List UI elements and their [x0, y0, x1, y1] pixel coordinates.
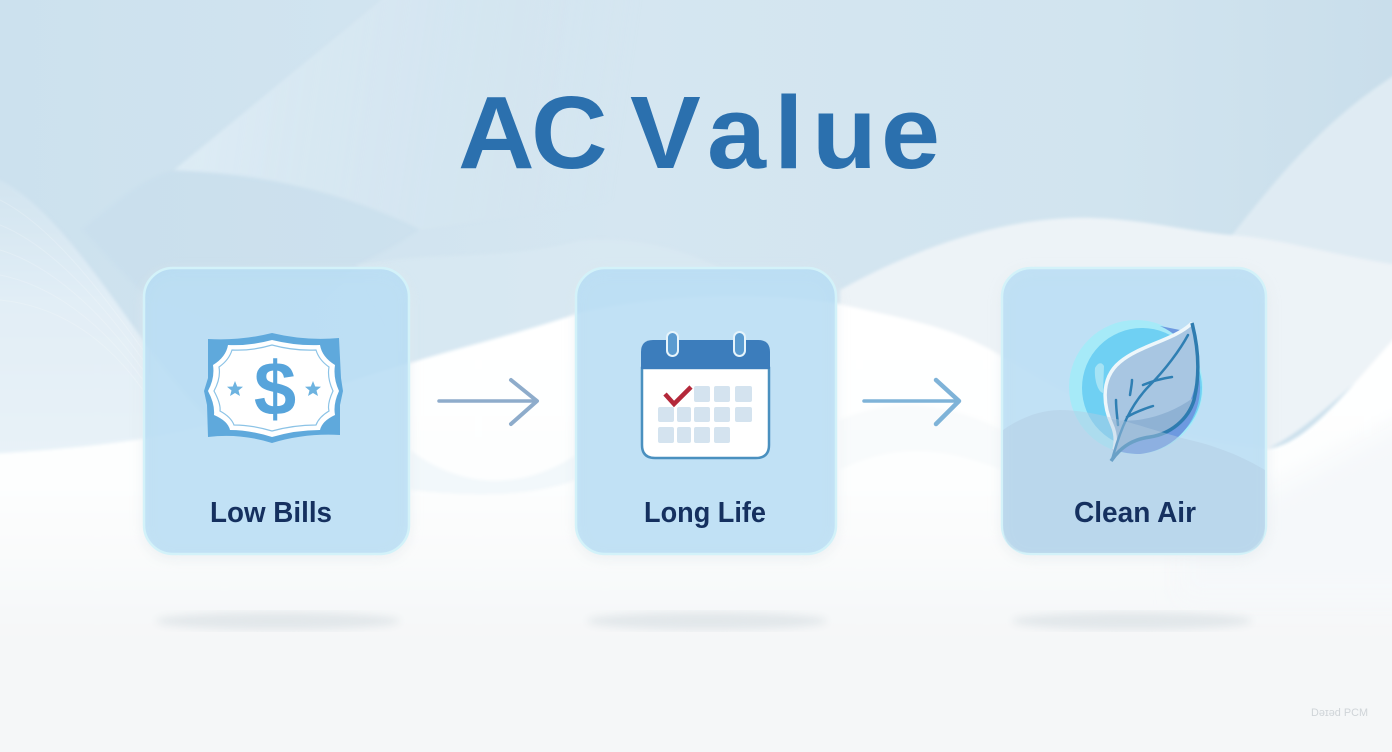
- shadow: card 1: [156, 612, 400, 630]
- label: Clean Air: [1074, 497, 1196, 529]
- title: AC Value: [0, 75, 940, 191]
- icon: leaf in circle: [1069, 320, 1203, 461]
- icon: dollar bill: [204, 333, 343, 443]
- shadow: card 3: [1012, 612, 1252, 630]
- label: Low Bills: [210, 497, 332, 529]
- date grid: [658, 386, 752, 443]
- arrow 2: [864, 380, 959, 424]
- shadow: card 2: [587, 612, 827, 630]
- card wave overlay: [1003, 410, 1265, 553]
- icon: star left: [227, 381, 243, 396]
- red check mark: [665, 387, 691, 404]
- label: Long Life: [644, 497, 766, 529]
- arrow 1: [439, 380, 537, 424]
- dollar sign: $: [254, 347, 296, 432]
- leaf veins: [1112, 335, 1188, 460]
- icon: calendar: [641, 332, 770, 458]
- icon: star right: [305, 381, 321, 396]
- panel: Low Bills: [143, 268, 410, 559]
- panel: Long Life: [575, 268, 837, 559]
- panel: Clean Air: [1001, 268, 1268, 559]
- watermark: Dəɪəd PCM: [1311, 707, 1368, 719]
- calendar rings: [667, 332, 678, 356]
